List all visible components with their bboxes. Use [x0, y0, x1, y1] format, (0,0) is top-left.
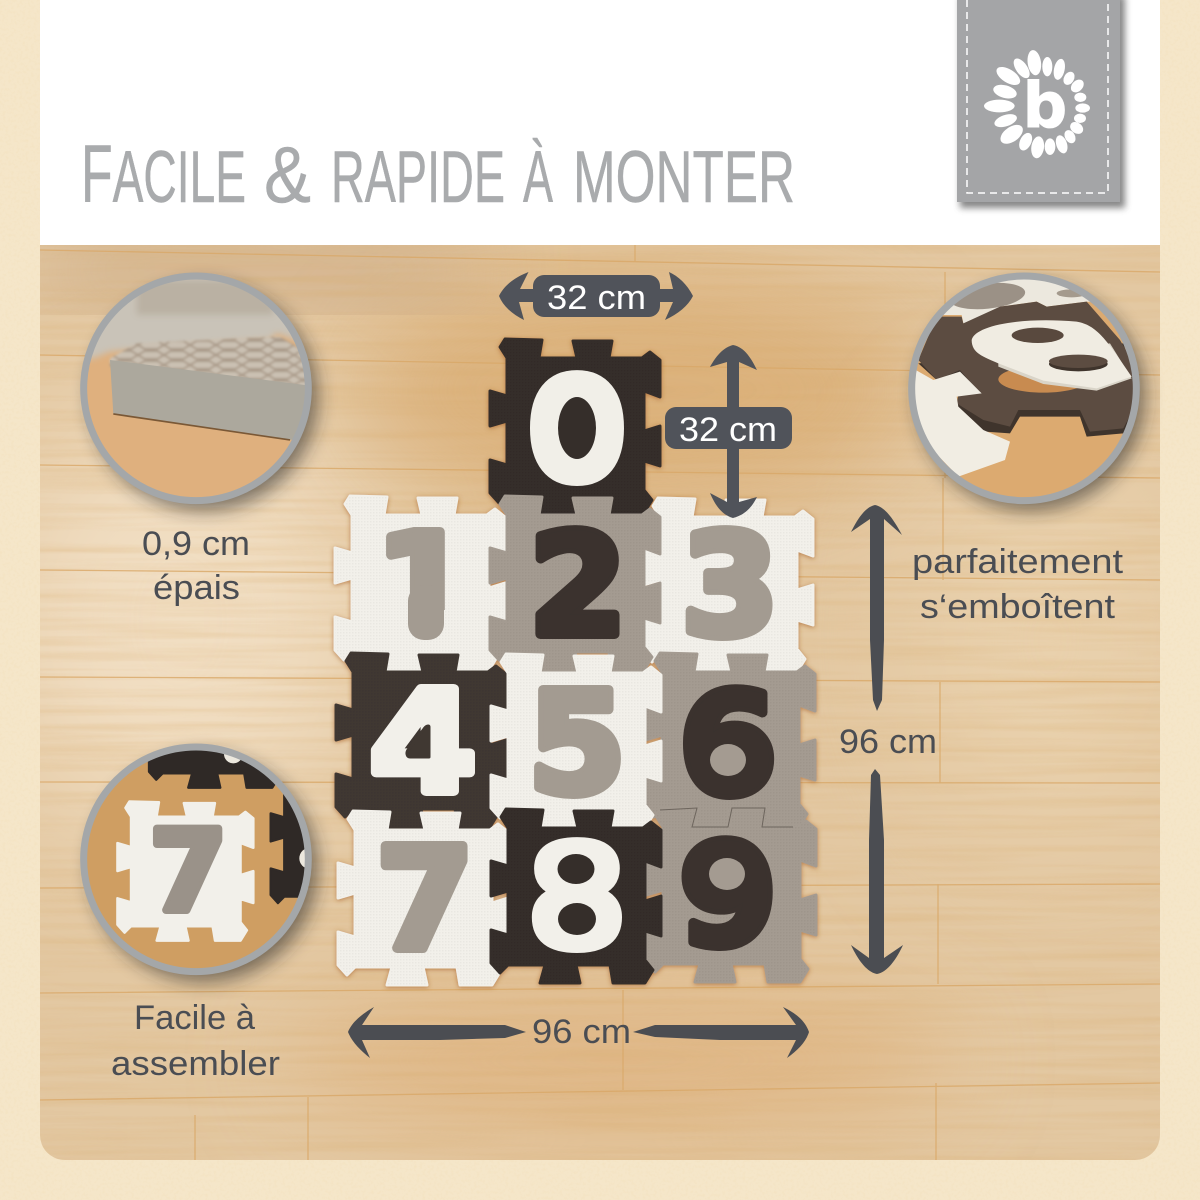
tile 7 [338, 811, 508, 985]
title [81, 129, 795, 220]
tile 8 [491, 809, 661, 983]
title: À [523, 137, 553, 218]
tile 0: 0 [528, 350, 626, 513]
tile 1: 1 [375, 505, 473, 668]
circle inset: easy assembly: 7 [149, 807, 227, 937]
logo letter: b [1023, 69, 1067, 142]
tile 6: 6 [679, 664, 777, 827]
label: interlock: parfaitement [912, 543, 1124, 581]
title: & [264, 130, 311, 219]
circle inset: foam thickness [80, 273, 318, 511]
tile 3: 3 [681, 505, 779, 668]
label: thickness [142, 525, 250, 607]
circle inset: easy assembly [77, 741, 331, 994]
label: easy to assemble: Facile à [134, 999, 255, 1037]
tile 8: 8 [528, 817, 626, 980]
arrow: top width 32 cm: 32 cm [547, 279, 646, 317]
circle inset: interlocking pieces [907, 273, 1147, 511]
tile 1 [335, 496, 505, 670]
tile 0 [490, 339, 660, 513]
tile 2 [490, 496, 660, 670]
arrow: side height 32 cm [665, 345, 792, 518]
title: FACILE [81, 129, 246, 220]
label: thickness: 0,9 cm [142, 525, 250, 563]
tile 9: 9 [679, 815, 777, 978]
arrow: side height 32 cm: 32 cm [679, 411, 777, 449]
tile 6 [645, 653, 815, 827]
label: interlock: s‘emboîtent [920, 588, 1116, 626]
tile 7: 7 [376, 819, 474, 982]
label: interlock [912, 543, 1124, 626]
tile 2: 2 [529, 505, 627, 668]
tile 9 [646, 808, 816, 982]
logo tag [957, 0, 1125, 208]
title: MONTER [573, 137, 795, 218]
label: 96 cm height: 96 cm [839, 723, 937, 761]
tile 4 [336, 653, 506, 827]
tile 5 [491, 654, 661, 828]
label: 96 cm width: 96 cm [532, 1013, 631, 1051]
arrow: top width 32 cm [499, 272, 693, 320]
tile 3 [643, 498, 813, 672]
arrow: mat width 96 cm [348, 1007, 809, 1058]
wood floor panel [0, 245, 1180, 1160]
tile 4: 4 [369, 661, 477, 824]
header panel [40, 0, 1160, 245]
tile 5: 5 [528, 663, 626, 826]
label: easy to assemble: assembler [111, 1045, 280, 1083]
label: easy to assemble [111, 999, 280, 1083]
puzzle mat [335, 339, 816, 985]
icon: flower logo [984, 49, 1090, 159]
arrow: mat height 96 cm [839, 505, 937, 974]
label: thickness: épais [153, 569, 240, 607]
title: RAPIDE [331, 137, 505, 218]
